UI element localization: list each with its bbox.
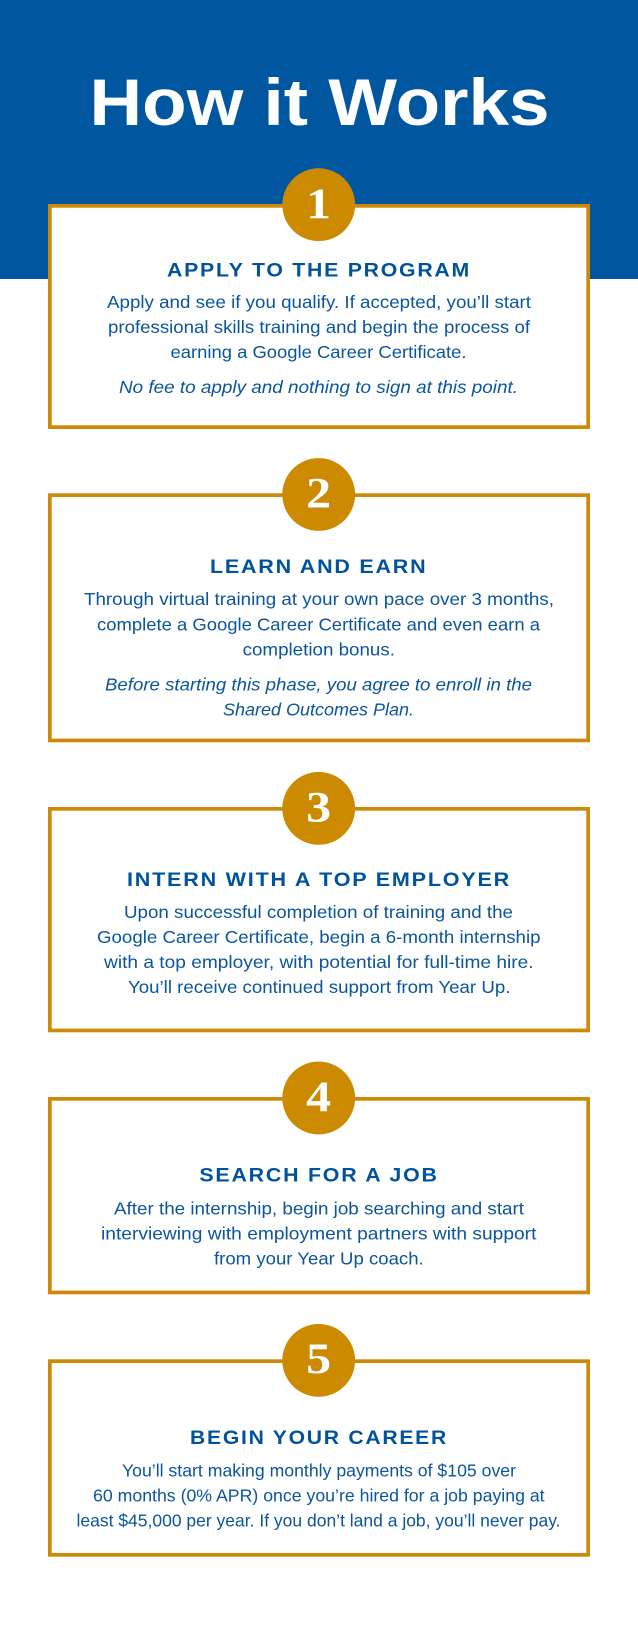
step 3 body text bbox=[97, 902, 540, 997]
step 3 body text: with a top employer, with potential for full-time hire. bbox=[103, 952, 534, 972]
step 4 heading: SEARCH FOR A JOB bbox=[199, 1164, 439, 1186]
step 5 frame bbox=[50, 1361, 588, 1555]
panel: step 1 apply to the program bbox=[50, 168, 588, 427]
step 2 heading: LEARN AND EARN bbox=[210, 556, 427, 578]
step 4 body text: from your Year Up coach. bbox=[214, 1248, 424, 1268]
step 3 body text: Upon successful completion of training and the bbox=[124, 902, 513, 922]
step 4 body text: After the internship, begin job searching and start bbox=[114, 1198, 524, 1218]
step 1 body text: Apply and see if you qualify. If accepted, you’ll start bbox=[107, 292, 531, 312]
panel: step 4 search for a job bbox=[50, 1062, 588, 1292]
step 1 heading: APPLY TO THE PROGRAM bbox=[167, 260, 471, 282]
step 4 body text bbox=[101, 1198, 537, 1268]
panel: step 5 begin your career bbox=[50, 1324, 588, 1555]
step 3 body text: Google Career Certificate, begin a 6-month internship bbox=[97, 927, 540, 947]
step 5 body text: 60 months (0% APR) once you’re hired for a job paying at bbox=[93, 1486, 545, 1506]
step 5 body text: You’ll start making monthly payments of $105 over bbox=[122, 1460, 516, 1480]
step 1 number badge bbox=[282, 168, 355, 241]
step 2 italic note: Shared Outcomes Plan. bbox=[223, 699, 414, 719]
step 1 body text bbox=[107, 292, 531, 362]
step 5 heading: BEGIN YOUR CAREER bbox=[190, 1427, 448, 1449]
step 4 number badge bbox=[282, 1062, 355, 1134]
step 1 italic note: No fee to apply and nothing to sign at this point. bbox=[119, 377, 518, 397]
step 2 italic note bbox=[105, 674, 532, 719]
step 4 number badge: 4 bbox=[306, 1074, 331, 1121]
step 2 body text bbox=[84, 589, 554, 659]
step 4 frame bbox=[50, 1099, 588, 1292]
step 2 italic note: Before starting this phase, you agree to enroll in the bbox=[105, 674, 532, 694]
step 3 body text: You’ll receive continued support from Year Up. bbox=[128, 977, 510, 997]
step 1 number badge: 1 bbox=[306, 181, 331, 228]
panel: step 3 intern with a top employer bbox=[50, 772, 588, 1030]
step 5 body text: least $45,000 per year. If you don’t land a job, you’ll never pay. bbox=[76, 1510, 560, 1530]
step 5 number badge bbox=[282, 1324, 355, 1397]
step 1 frame bbox=[50, 206, 588, 427]
step 3 number badge bbox=[282, 772, 355, 845]
step 4 body text: interviewing with employment partners with support bbox=[101, 1224, 537, 1244]
step 3 heading: INTERN WITH A TOP EMPLOYER bbox=[127, 869, 511, 891]
step 2 frame bbox=[50, 495, 588, 740]
step 3 frame bbox=[50, 809, 588, 1030]
step 2 number badge: 2 bbox=[306, 471, 331, 518]
step 5 body text bbox=[76, 1460, 560, 1530]
title: How it Works bbox=[90, 65, 550, 139]
step 1 body text: earning a Google Career Certificate. bbox=[170, 342, 466, 362]
step 3 number badge: 3 bbox=[306, 784, 331, 832]
step 2 number badge bbox=[282, 458, 355, 531]
panel: step 2 learn and earn bbox=[50, 458, 588, 740]
step 2 body text: completion bonus. bbox=[243, 639, 395, 659]
step 5 number badge: 5 bbox=[306, 1336, 331, 1383]
step 1 body text: professional skills training and begin the process of bbox=[108, 317, 530, 337]
step 2 body text: Through virtual training at your own pace over 3 months, bbox=[84, 589, 554, 609]
header background band bbox=[0, 0, 638, 279]
step 2 body text: complete a Google Career Certificate and even earn a bbox=[97, 614, 540, 634]
